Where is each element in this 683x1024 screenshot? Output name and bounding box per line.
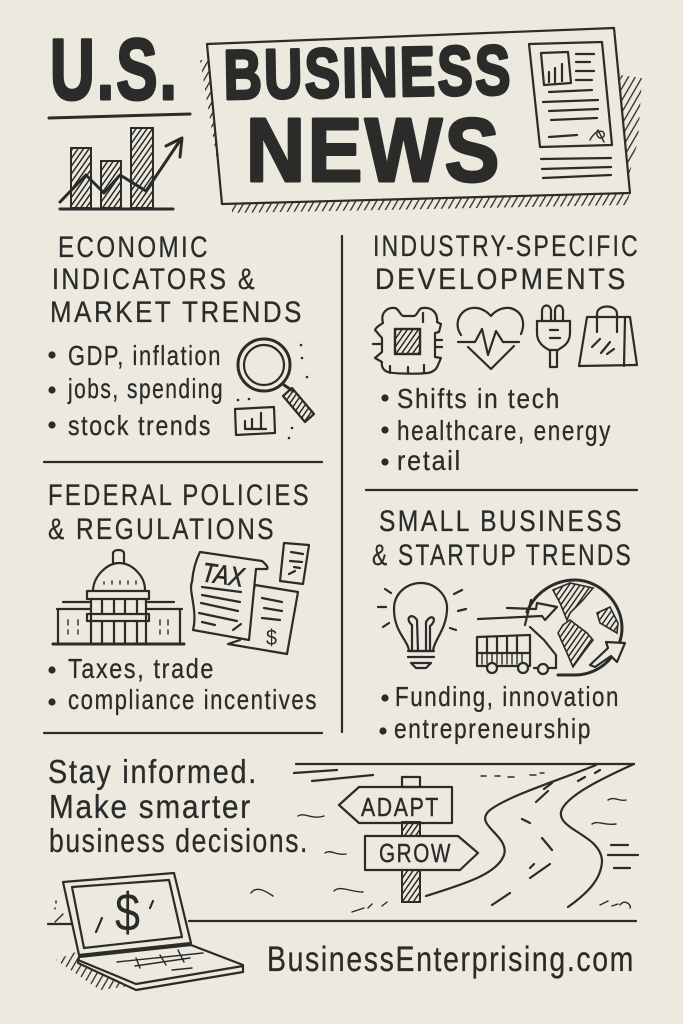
bullet list: federal xyxy=(48,653,318,715)
bullet list: industry xyxy=(381,383,612,476)
icon: light bulb xyxy=(378,583,466,668)
heading: economic indicators: INDICATORS & xyxy=(52,263,257,296)
bullet list: federal: compliance incentives xyxy=(68,684,318,715)
heading: industry developments: DEVELOPMENTS xyxy=(375,263,628,296)
heading: industry developments xyxy=(373,230,640,296)
panel: footer road scene xyxy=(48,753,638,990)
sign: GROW: GROW xyxy=(379,838,452,868)
label: TAX: TAX xyxy=(200,557,247,593)
bullet list: economic: jobs, spending xyxy=(67,373,224,404)
panel: industry-specific developments xyxy=(366,230,640,490)
icon: shopping bag xyxy=(579,306,637,366)
heading: economic indicators xyxy=(50,231,304,329)
icon: microchip xyxy=(373,308,442,374)
panel: federal policies and regulations xyxy=(44,479,322,733)
icon: magnifying glass over small chart xyxy=(235,339,314,439)
bullet list: small business: Funding, innovation xyxy=(395,681,620,712)
icon: signpost xyxy=(339,777,478,902)
bullet list: economic xyxy=(48,340,224,441)
heading: federal policies xyxy=(48,479,311,546)
bullet list: small business: entrepreneurship xyxy=(394,713,592,744)
icon: laptop with dollar screen: $ xyxy=(115,883,140,943)
heading: federal policies: & REGULATIONS xyxy=(48,513,276,546)
panel: Business News newspaper banner xyxy=(200,28,642,213)
bullet list: industry: retail xyxy=(397,445,462,476)
ground line xyxy=(48,921,636,924)
bullet list: federal: Taxes, trade xyxy=(68,653,215,684)
heading: small business: SMALL BUSINESS xyxy=(379,505,624,538)
icon: capitol building xyxy=(53,550,184,644)
sign: ADAPT: ADAPT xyxy=(361,792,440,822)
bullet list: small business xyxy=(379,681,620,744)
bullet list: industry: healthcare, energy xyxy=(397,415,612,446)
divider: vertical centre line xyxy=(341,236,343,732)
title: U.S. with chart xyxy=(49,22,190,209)
icon: globe with delivery truck and arrows xyxy=(477,580,625,675)
icon: bar chart with rising arrow xyxy=(60,128,182,209)
heading: BUSINESS: BUSINESS xyxy=(223,31,513,114)
icon: laptop with dollar screen xyxy=(56,873,243,990)
icon: electric plug xyxy=(537,306,570,367)
heading: U.S.: U.S. xyxy=(50,22,179,118)
heading: economic indicators: ECONOMIC xyxy=(58,231,210,264)
bullet list: economic: stock trends xyxy=(68,410,212,441)
panel: small business and startup trends xyxy=(372,505,633,744)
text: call to action: Make smarter xyxy=(49,788,252,825)
heading: economic indicators: MARKET TRENDS xyxy=(50,296,304,329)
icon: tax documents xyxy=(191,543,309,654)
text: call to action: business decisions. xyxy=(49,822,309,859)
heading: small business xyxy=(372,505,633,572)
text: call to action xyxy=(48,753,309,859)
bullet list: economic: GDP, inflation xyxy=(68,340,222,371)
heading: NEWS: NEWS xyxy=(246,101,502,201)
heading: federal policies: FEDERAL POLICIES xyxy=(48,479,311,512)
icon: tax documents: $ xyxy=(266,625,277,650)
illustration: winding road xyxy=(251,764,638,912)
bullet list: industry: Shifts in tech xyxy=(397,383,561,414)
icon: heart with pulse xyxy=(458,308,523,369)
icon: newspaper page xyxy=(529,42,612,178)
panel: economic indicators and market trends xyxy=(44,231,322,462)
text: call to action: Stay informed. xyxy=(48,753,258,790)
